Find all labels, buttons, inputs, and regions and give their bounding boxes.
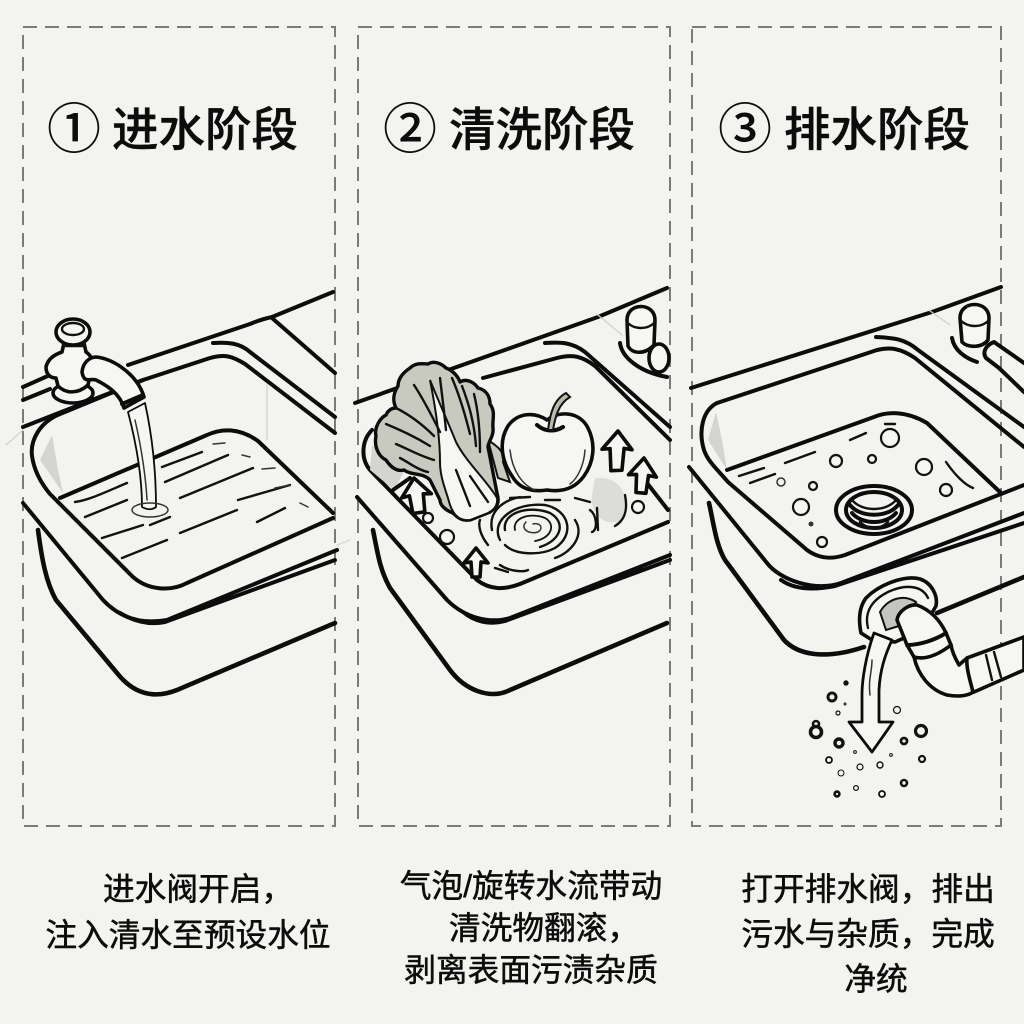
icon: rising arrows [399, 430, 658, 577]
bubbles [423, 501, 644, 544]
heading: stage 3: ③ [718, 100, 772, 160]
panel: drain stage [689, 27, 1024, 997]
heading: stage 2: ② [383, 100, 437, 160]
icon: faucet [46, 319, 144, 408]
bubbles [777, 429, 952, 547]
heading: stage 2: 清洗阶段 [449, 104, 635, 156]
water surface marks [739, 424, 973, 488]
icon: drain hole [836, 486, 912, 534]
icon: bok choy [375, 362, 510, 520]
heading: stage 3 [718, 100, 970, 160]
icon: drain pipe [860, 578, 1024, 696]
sink: stage 2 [355, 288, 670, 694]
heading: stage 2 [383, 100, 635, 160]
caption: stage 1: 注入清水至预设水位 [45, 917, 331, 953]
heading: stage 3: 排水阶段 [784, 104, 970, 156]
water stream and down arrow [849, 633, 893, 752]
caption: stage 3: 打开排水阀，排出 [741, 871, 995, 907]
debris particles [810, 681, 926, 797]
panel: washing stage [355, 27, 670, 988]
icon: faucet background [952, 304, 1024, 392]
heading: stage 1 [47, 100, 298, 160]
caption: stage 2: 气泡/旋转水流带动 [400, 868, 662, 904]
caption: stage 3: 净统 [844, 961, 908, 997]
water stream [128, 403, 168, 517]
caption: stage 2: 清洗物翻滚， [449, 910, 639, 946]
water pool and swirl [479, 478, 626, 572]
panel: inlet stage [6, 27, 350, 953]
sink: stage 1 [6, 292, 350, 694]
water ripple lines [75, 443, 308, 558]
caption: stage 2: 剥离表面污渍杂质 [404, 952, 658, 988]
heading: stage 1: 进水阶段 [112, 104, 298, 156]
caption: stage 3: 污水与杂质，完成 [741, 916, 995, 952]
caption: stage 1: 进水阀开启， [103, 871, 293, 907]
sink: stage 3 [689, 287, 1024, 797]
heading: stage 1: ① [47, 100, 101, 160]
icon: apple [502, 393, 593, 491]
icon: faucet background [620, 306, 669, 377]
